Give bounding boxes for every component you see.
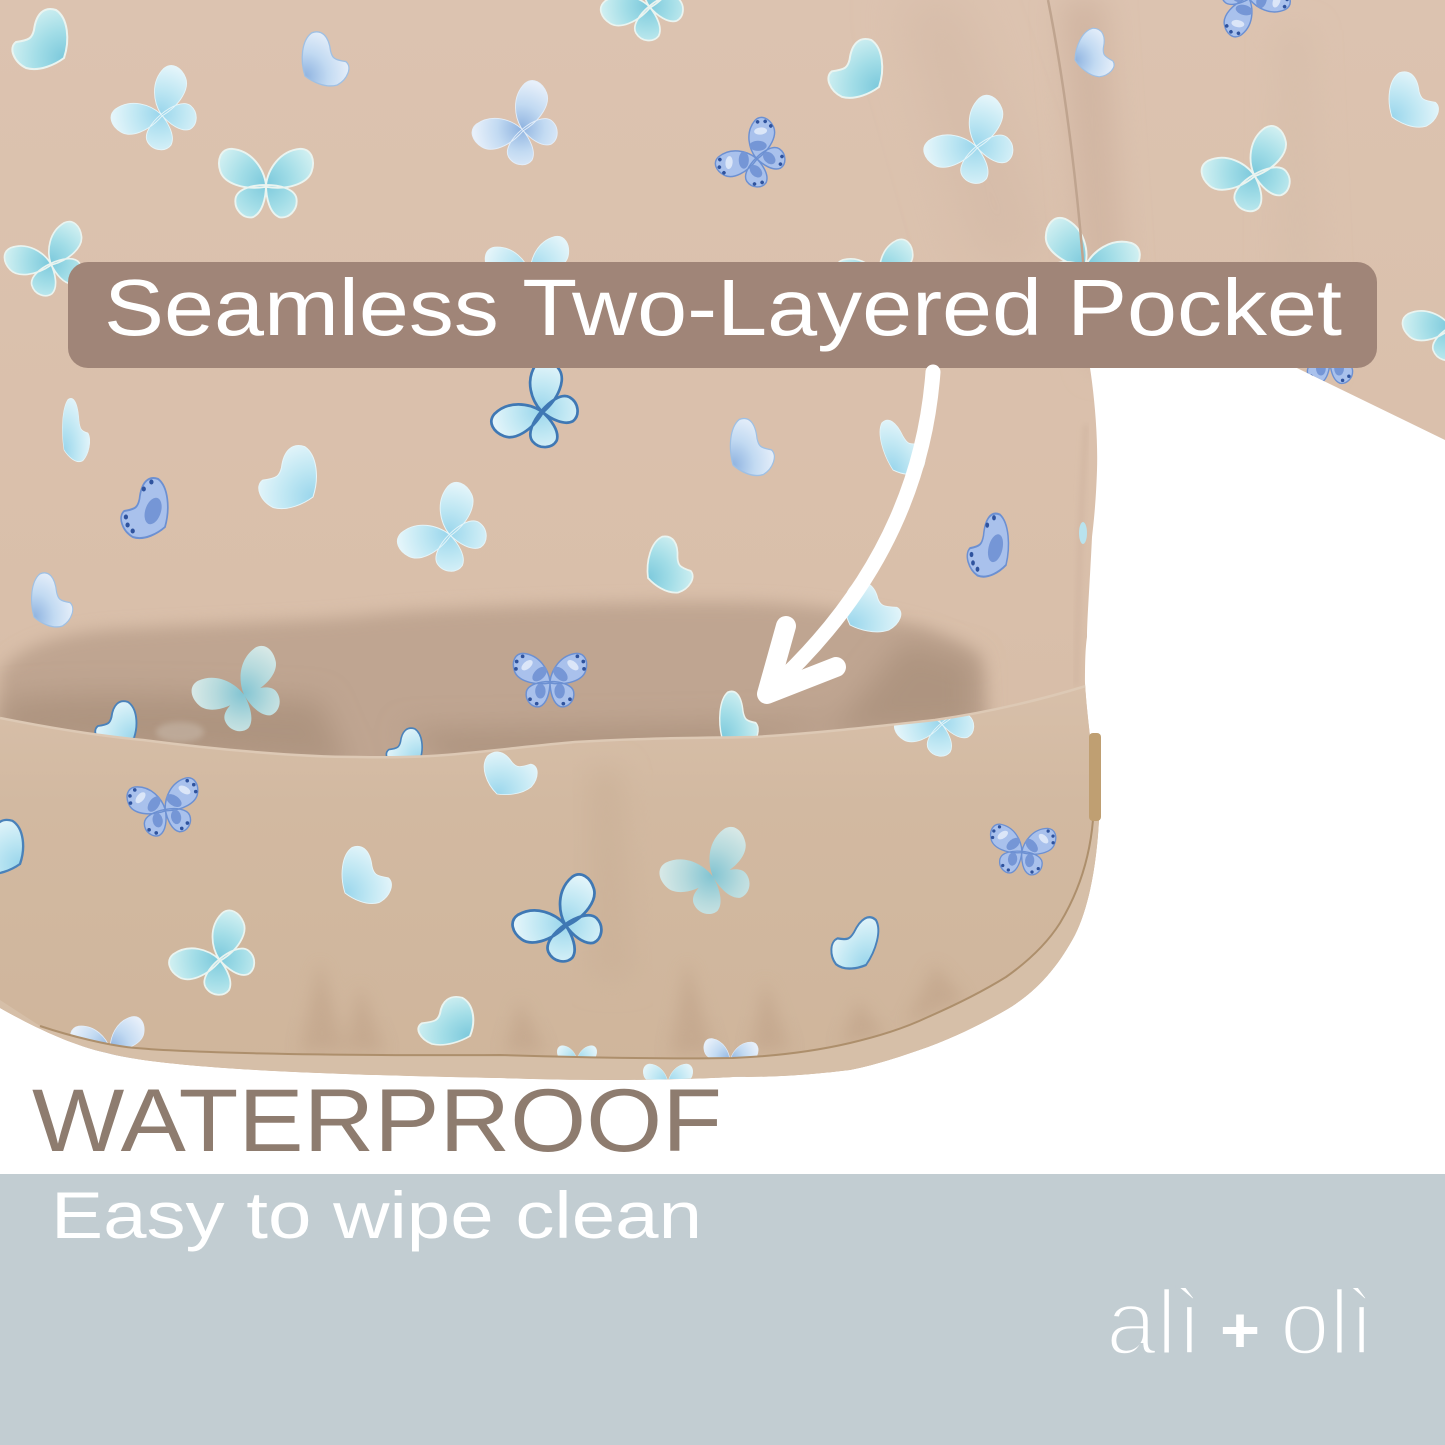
butterfly — [967, 514, 1008, 577]
body fold shadows — [900, 0, 1050, 262]
butterfly — [701, 1038, 759, 1082]
butterfly — [923, 94, 1014, 184]
logo: ali+oli: + — [1220, 1294, 1260, 1366]
butterfly — [342, 846, 391, 904]
logo: ali+oli — [1106, 1272, 1374, 1374]
hem seam line — [40, 820, 1093, 1058]
butterfly — [557, 1046, 597, 1075]
butterfly — [1044, 216, 1141, 262]
butterfly — [472, 80, 558, 166]
butterfly — [478, 739, 543, 803]
butterfly — [655, 822, 769, 928]
butterfly — [95, 701, 136, 746]
butterfly — [828, 39, 882, 98]
butterfly — [1389, 72, 1438, 127]
butterfly — [125, 776, 205, 840]
butterfly — [1306, 368, 1354, 384]
sleeve seam line — [1046, 0, 1084, 262]
butterflies: pocket interior — [94, 646, 759, 756]
butterfly — [826, 908, 884, 976]
butterfly — [4, 220, 82, 297]
bib body fabric — [0, 0, 1445, 1100]
pocket interior shadow — [0, 598, 992, 756]
brand tag — [1089, 733, 1101, 821]
butterfly — [418, 997, 473, 1045]
sleeve folds — [1066, 6, 1304, 372]
butterflies: upper print — [1, 0, 1445, 635]
pocket front panel — [0, 673, 1110, 1100]
butterfly — [714, 116, 786, 188]
butterfly — [302, 32, 349, 86]
interior lint speck — [156, 722, 204, 742]
butterfly — [1074, 28, 1115, 78]
logo: ali+oli: alì — [1106, 1272, 1202, 1374]
butterfly — [600, 0, 684, 42]
bottom hem band — [0, 815, 1110, 1100]
butterfly — [396, 482, 487, 572]
butterfly — [646, 536, 694, 594]
butterfly — [219, 149, 313, 217]
pocket folds — [590, 770, 635, 980]
butterfly — [987, 823, 1057, 877]
butterfly — [187, 642, 299, 745]
butterfly — [69, 1015, 151, 1081]
butterfly — [846, 584, 902, 632]
butterfly — [259, 446, 316, 509]
butterfly — [12, 9, 67, 69]
butterfly — [890, 673, 990, 771]
butterfly — [720, 691, 758, 749]
butterfly — [110, 65, 197, 150]
butterfly — [513, 653, 587, 707]
butterfly — [880, 420, 926, 474]
side panel crease — [1076, 425, 1086, 686]
bib garment — [0, 0, 1445, 1100]
butterfly — [508, 870, 620, 976]
butterfly — [164, 906, 272, 1010]
butterfly — [1200, 125, 1291, 212]
butterfly — [1222, 0, 1291, 38]
logo: ali+oli: olì — [1280, 1272, 1374, 1374]
subheading: Easy to wipe clean: Easy to wipe clean — [51, 1178, 702, 1252]
heading: WATERPROOF: WATERPROOF — [32, 1070, 722, 1170]
butterfly — [838, 238, 914, 262]
butterfly edge fragment — [1079, 522, 1087, 544]
butterflies: pocket front print — [0, 673, 1057, 1082]
pocket top edge highlight — [0, 686, 1086, 757]
butterfly — [730, 418, 774, 476]
pocket bottom gathers — [300, 960, 965, 1055]
butterfly — [484, 236, 570, 262]
butterfly — [0, 820, 23, 874]
butterfly — [490, 368, 579, 448]
butterfly — [32, 573, 73, 627]
butterfly — [62, 399, 90, 462]
butterfly on hem — [643, 1064, 693, 1100]
arrow pointing into pocket — [767, 372, 933, 694]
callout label: Seamless Two-Layered Pocket: Seamless Two-Layered Pocket — [104, 263, 1342, 352]
butterfly — [386, 728, 422, 767]
butterfly — [121, 478, 168, 538]
bottom band — [0, 1174, 1445, 1445]
butterfly — [1402, 310, 1445, 361]
